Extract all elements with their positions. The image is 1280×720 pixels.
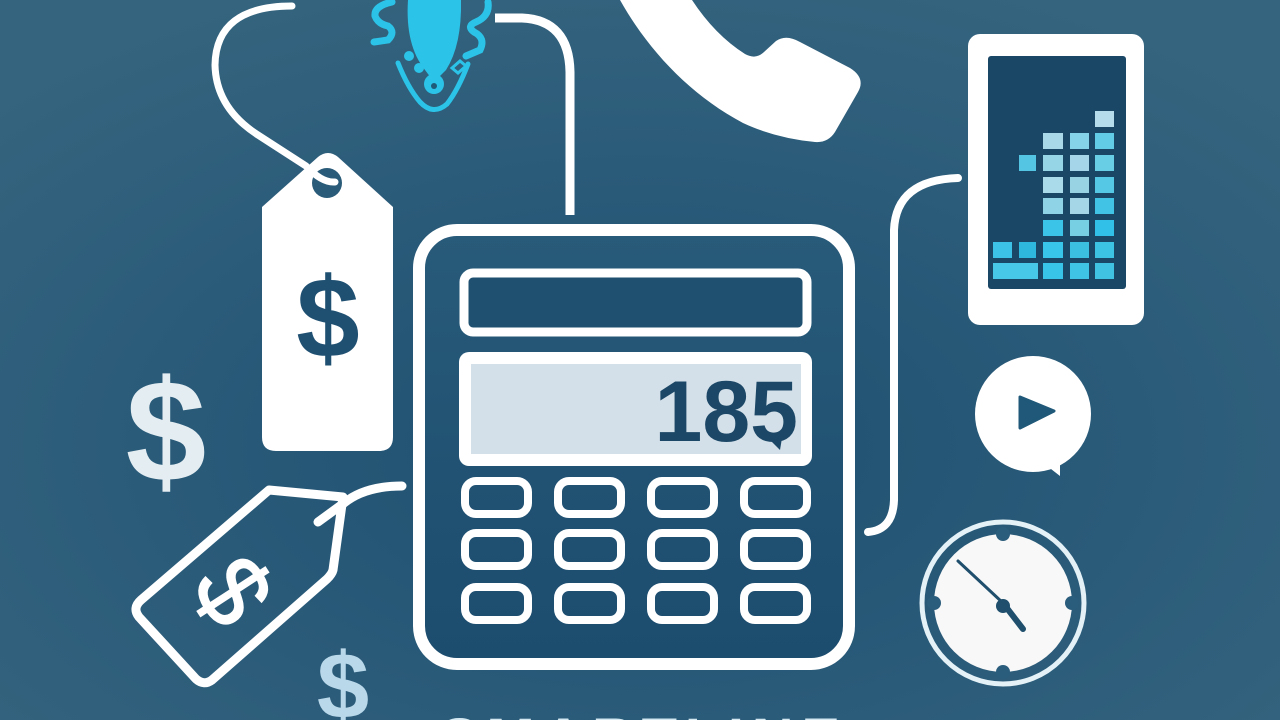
connector: bulb to calculator <box>495 18 570 215</box>
icon: loose dollar sign left: $ <box>126 350 206 512</box>
connector: calculator to tablet <box>868 178 958 532</box>
icon: telephone handset <box>620 0 861 142</box>
icon: hanging price tag with string <box>215 6 393 451</box>
icon: clock gauge <box>922 522 1084 684</box>
display value: 185 <box>654 364 798 460</box>
main display <box>459 352 812 466</box>
dollar on slanted tag: $ <box>171 537 295 645</box>
dollar on hanging tag: $ <box>296 255 360 382</box>
icon: play speech bubble <box>975 356 1091 476</box>
keypad <box>465 481 807 620</box>
icon: outlined slanted price tag <box>136 486 402 683</box>
icon: tablet with bar chart <box>968 34 1144 325</box>
upper display <box>464 273 807 332</box>
calculator <box>419 230 849 664</box>
calculator body <box>419 230 849 664</box>
bar chart <box>993 111 1114 279</box>
icon: cyan lightbulb top <box>374 0 488 110</box>
